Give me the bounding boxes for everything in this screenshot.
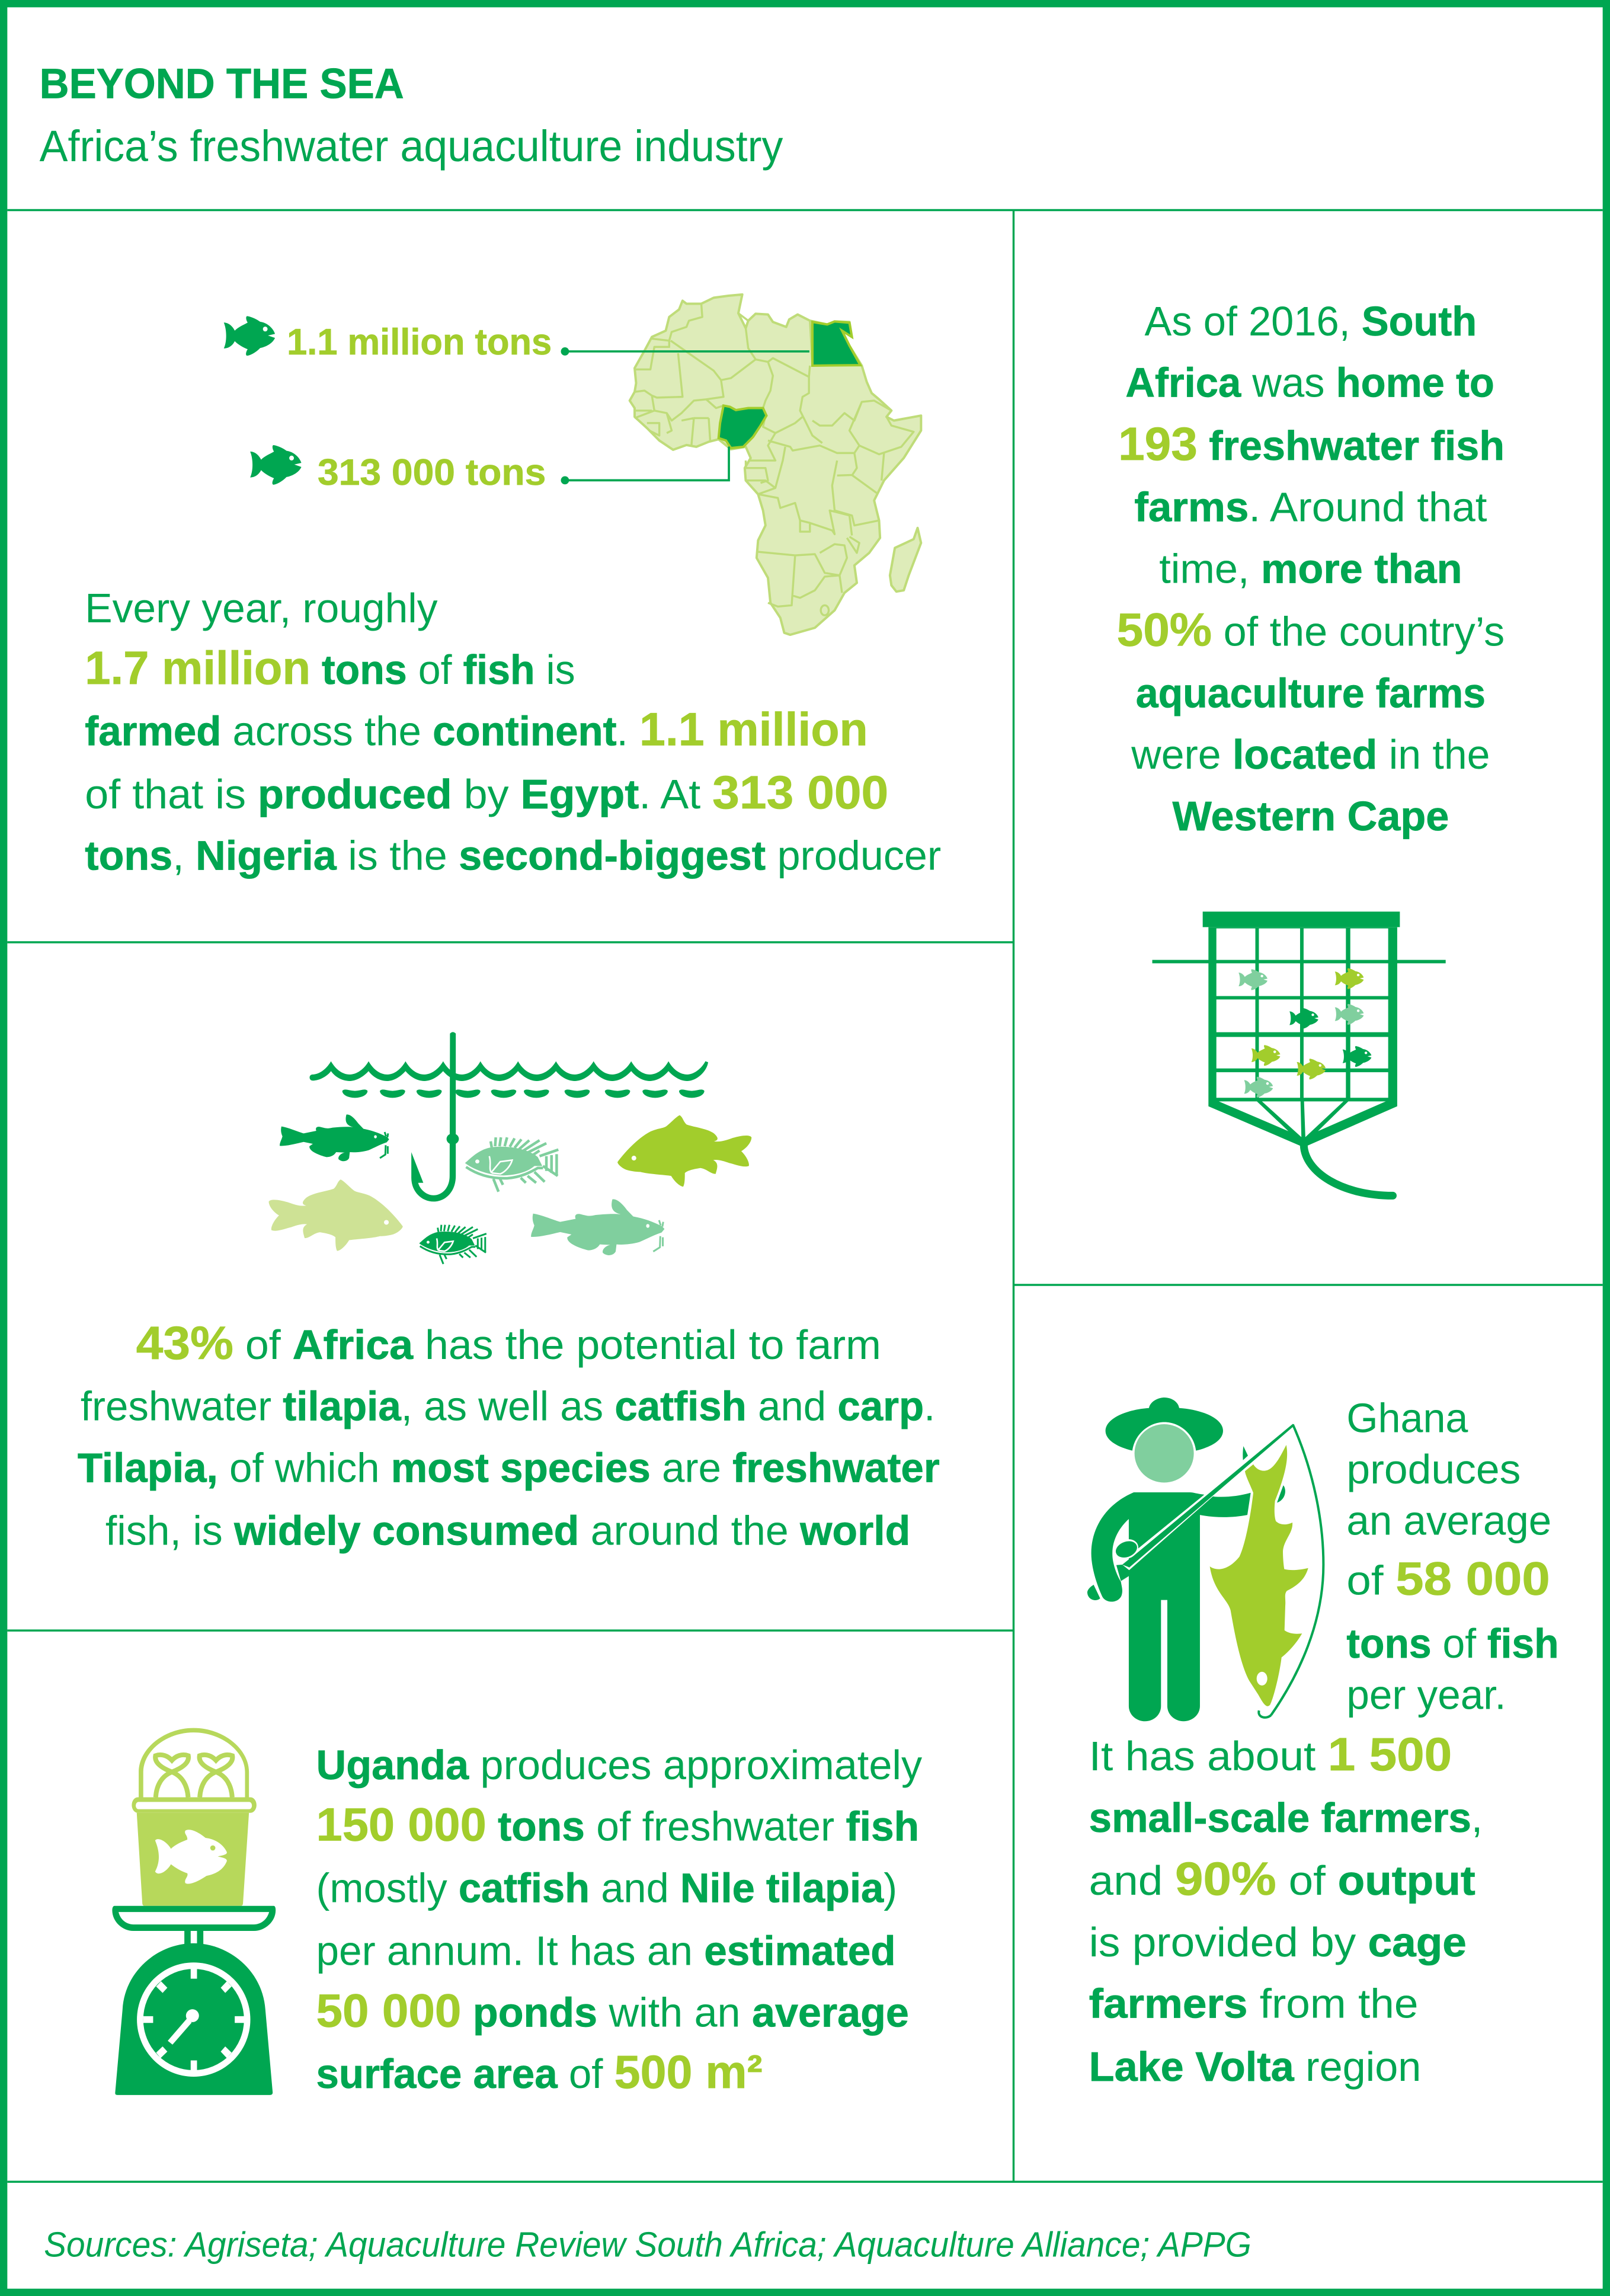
text: Uganda: surface area of 500 m² — [316, 2045, 763, 2098]
text: South Africa: were located in the — [1131, 731, 1490, 778]
text: Ghana below icon: farmers from the — [1089, 1981, 1418, 2027]
text: Ghana below icon: is provided by cage — [1089, 1919, 1467, 1965]
text: tilapia: fish, is widely consumed around the world — [105, 1508, 910, 1554]
panel: Uganda — [112, 1728, 923, 2098]
fishing rod — [1113, 1422, 1323, 1718]
icon: fisherman with fish — [1087, 1398, 1323, 1721]
text: South Africa: aquaculture farms — [1136, 670, 1486, 716]
hat — [1106, 1398, 1223, 1451]
text: Uganda: per annum. It has an estimated — [316, 1928, 896, 1974]
text: tilapia — [78, 1316, 940, 1554]
water waves — [310, 1061, 708, 1098]
map of Africa — [630, 295, 921, 635]
fish hook — [411, 1032, 459, 1201]
icon: fish Nigeria — [250, 445, 302, 485]
text: Uganda: Uganda produces approximately — [316, 1742, 923, 1788]
panel: Ghana — [1087, 1395, 1559, 2090]
head — [1135, 1424, 1194, 1482]
hanging fish — [1210, 1445, 1308, 1706]
text: Ghana beside icon: an average — [1346, 1497, 1551, 1543]
scale — [112, 1906, 276, 2095]
text: Uganda: (mostly catfish and Nile tilapia) — [316, 1865, 897, 1911]
text: South Africa: 50% of the country’s — [1117, 603, 1505, 656]
text: tilapia: 43% of Africa has the potential to farm — [136, 1316, 881, 1369]
text: South Africa — [1117, 298, 1505, 839]
text: Africa production: of that is produced by Egypt . At 313 000 — [85, 766, 888, 818]
leader line: Nigeria — [561, 447, 729, 484]
text: Ghana below icon: and 90% of output — [1089, 1852, 1475, 1905]
Nigeria highlighted — [719, 405, 766, 448]
text: South Africa: 193 freshwater fish — [1118, 417, 1505, 470]
catfish dark — [280, 1114, 389, 1161]
subtitle: Africa’s freshwater aquaculture industry — [40, 121, 783, 171]
title: BEYOND THE SEA — [40, 60, 404, 108]
text: South Africa: time, more than — [1159, 545, 1462, 591]
text: Ghana below icon: It has about 1 500 — [1089, 1728, 1452, 1780]
text: Africa production: farmed across the continent. 1.1 million — [85, 703, 868, 756]
Egypt highlighted — [812, 321, 860, 366]
text: Ghana below icon: Lake Volta region — [1089, 2044, 1421, 2090]
text: Uganda: 50 000 ponds with an average — [316, 1984, 909, 2036]
sources: Sources: Agriseta; Aquaculture Review South Africa; Aquaculture Alliance; APPG — [44, 2224, 1251, 2264]
text: Africa production — [85, 585, 941, 879]
text: Ghana beside icon — [1346, 1395, 1559, 1718]
text: Africa production: 1.7 million tons of fish is — [85, 641, 575, 694]
panel: tilapia potential — [78, 1032, 940, 1554]
text: Uganda — [316, 1742, 923, 2098]
text: Africa production: tons, Nigeria is the second-biggest producer — [85, 833, 941, 879]
label: Nigeria tonnage: 313 000 tons — [318, 452, 546, 493]
text: South Africa: Africa was home to — [1125, 360, 1494, 406]
tilapia small — [419, 1225, 486, 1264]
text: South Africa: As of 2016, South — [1145, 298, 1477, 344]
text: Ghana beside icon: per year. — [1346, 1671, 1506, 1718]
body — [1087, 1492, 1251, 1721]
text: tilapia: freshwater tilapia, as well as catfish and carp. — [81, 1383, 935, 1430]
panel: Africa production — [85, 295, 941, 879]
text: South Africa: Western Cape — [1172, 793, 1449, 839]
bucket — [132, 1728, 257, 1906]
carp lime — [617, 1115, 751, 1187]
label: Egypt tonnage: 1.1 million tons — [287, 322, 552, 363]
carp pale — [269, 1179, 403, 1251]
text: Ghana beside icon: Ghana — [1346, 1395, 1468, 1441]
leader line: Egypt — [561, 347, 809, 356]
text: Ghana beside icon: of 58 000 — [1346, 1552, 1550, 1605]
illustration: hook, water and fish — [269, 1032, 751, 1264]
text: Ghana below icon — [1089, 1728, 1483, 2090]
text: tilapia: Tilapia, of which most species are freshwater — [78, 1444, 940, 1491]
text: Ghana below icon: small-scale farmers, — [1089, 1795, 1483, 1841]
panel: South Africa farms — [1117, 298, 1505, 1195]
icon: fish Egypt — [224, 316, 275, 356]
text: South Africa: farms. Around that — [1134, 484, 1487, 530]
text: Ghana beside icon: tons of fish — [1346, 1620, 1559, 1667]
header — [40, 60, 783, 171]
text: Ghana beside icon: produces — [1346, 1446, 1521, 1492]
text: Uganda: 150 000 tons of freshwater fish — [316, 1798, 919, 1851]
icon: weighing scale with bucket — [112, 1728, 276, 2095]
icon: fish cage — [1153, 912, 1446, 1195]
catfish mint — [531, 1199, 664, 1255]
text: Africa production: Every year, roughly — [85, 585, 438, 631]
tilapia mint — [465, 1137, 558, 1192]
